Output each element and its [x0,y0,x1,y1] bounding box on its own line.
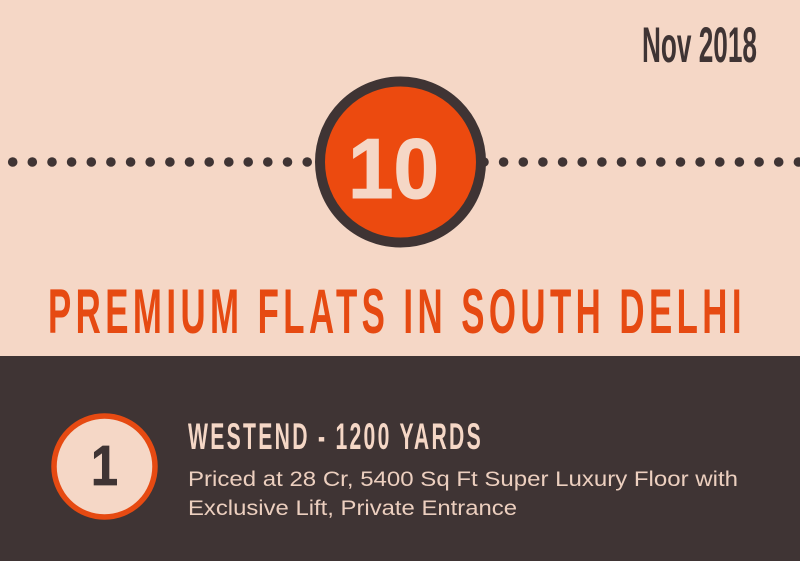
left dotted line [8,157,312,167]
right dotted line [479,157,800,167]
dark panel: listing [0,356,800,561]
listing description: Exclusive Lift, Private Entrance [188,497,517,520]
listing heading: WESTEND - 1200 YARDS [188,416,483,457]
listing description [188,468,738,520]
number badge [320,82,481,242]
dotted line with badge [8,82,800,242]
number badge: 10 [348,122,439,217]
listing description: Priced at 28 Cr, 5400 Sq Ft Super Luxury Floor with [188,468,738,491]
rank badge: 1 [91,434,118,498]
rank badge [54,416,155,517]
